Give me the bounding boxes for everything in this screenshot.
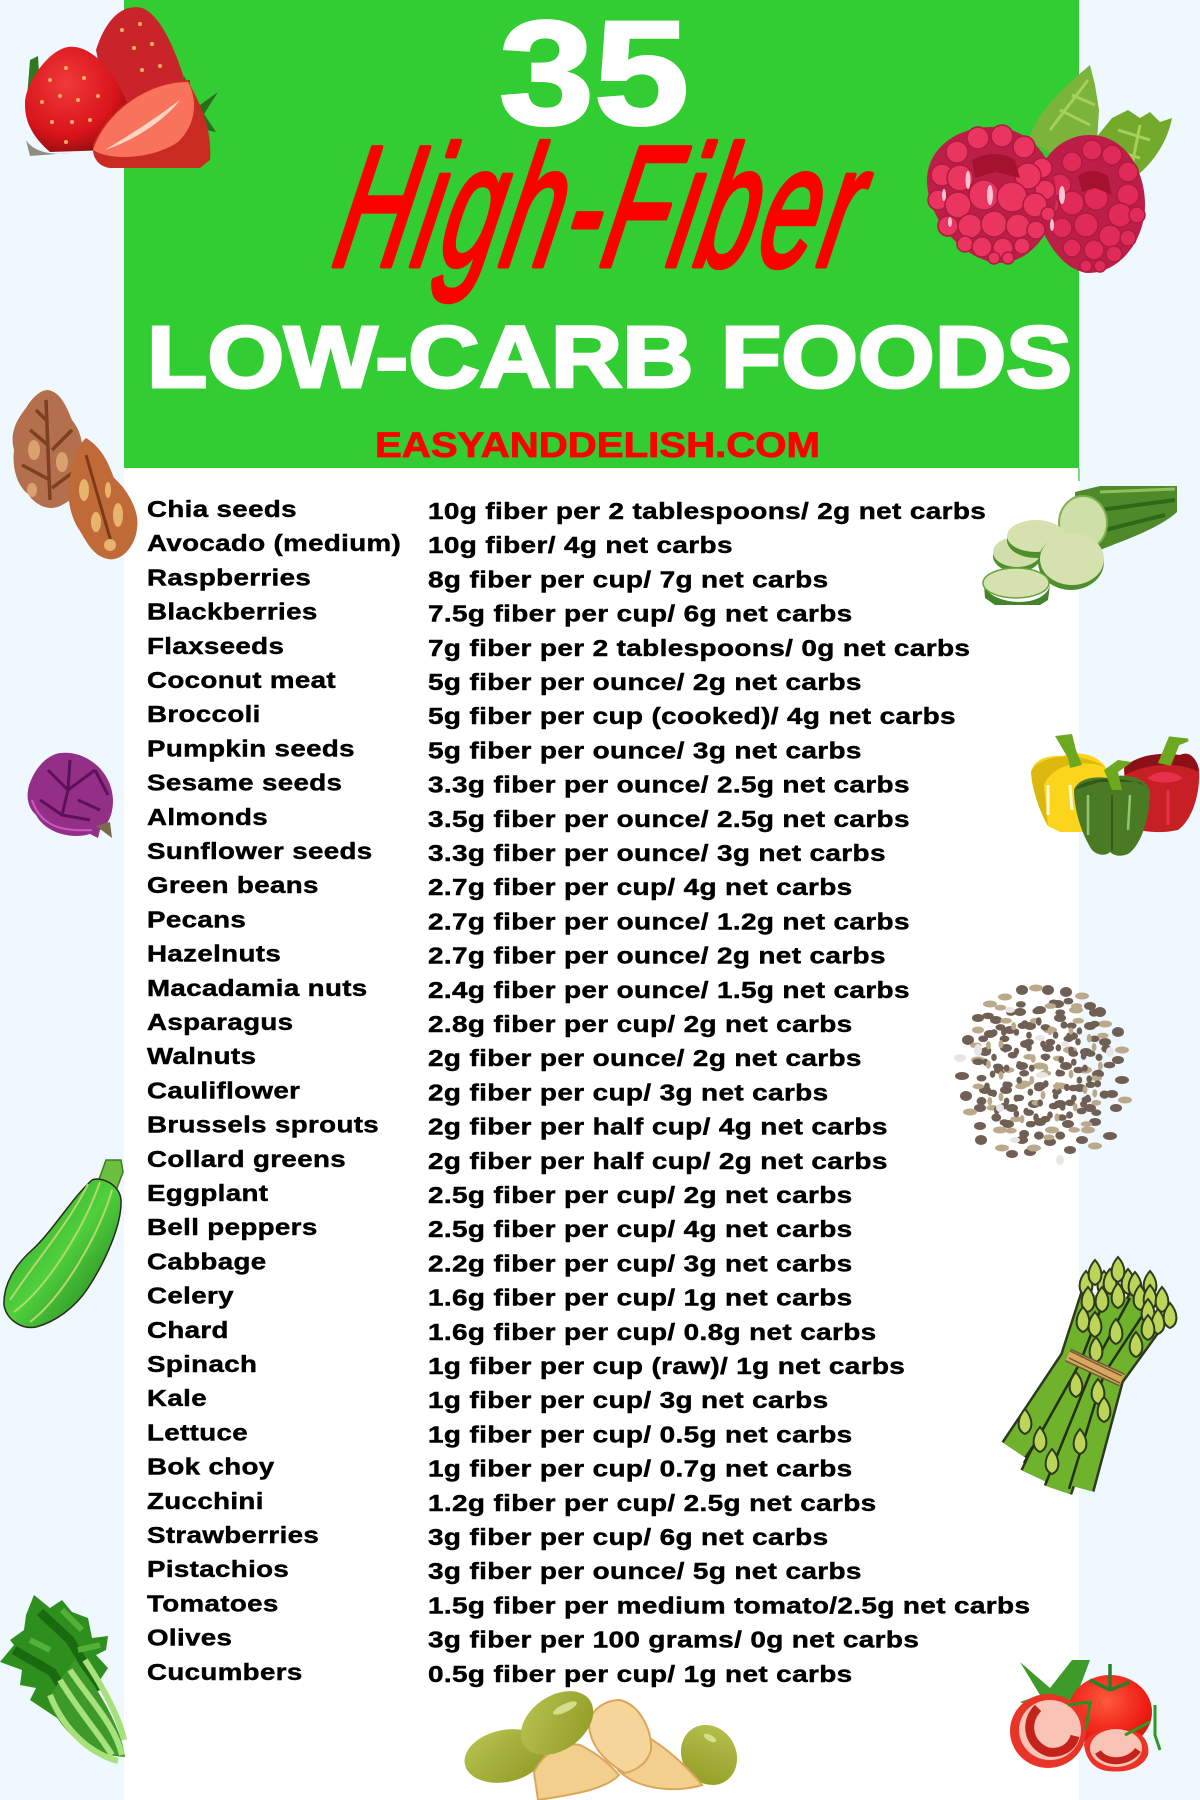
food names column: Bok choy bbox=[147, 1455, 275, 1480]
panel: green header bbox=[124, 0, 1080, 481]
icon: cucumber bbox=[983, 486, 1177, 605]
food names column: Blackberries bbox=[147, 600, 318, 625]
fiber and net carb values column: 2.7g fiber per ounce/ 2g net carbs bbox=[428, 944, 886, 969]
icon: pumpkin seeds bbox=[459, 1678, 748, 1800]
food names column: Tomatoes bbox=[147, 1592, 279, 1617]
fiber and net carb values column: 2.8g fiber per cup/ 2g net carbs bbox=[428, 1012, 853, 1037]
fiber and net carb values column: 5g fiber per ounce/ 3g net carbs bbox=[428, 739, 862, 764]
icon: raspberries bbox=[927, 65, 1172, 273]
fiber and net carb values column: 1g fiber per cup/ 3g net carbs bbox=[428, 1388, 829, 1414]
food names column: Macadamia nuts bbox=[147, 976, 368, 1001]
icon: celery bbox=[0, 1595, 125, 1761]
fiber and net carb values column: 2g fiber per cup/ 3g net carbs bbox=[428, 1081, 829, 1106]
fiber and net carb values column: 0.5g fiber per cup/ 1g net carbs bbox=[428, 1662, 853, 1687]
fiber and net carb values column: 5g fiber per ounce/ 2g net carbs bbox=[428, 670, 862, 695]
food names column bbox=[147, 497, 401, 1685]
fiber and net carb values column: 2.7g fiber per cup/ 4g net carbs bbox=[428, 875, 853, 901]
food names column: Broccoli bbox=[147, 702, 261, 728]
food names column: Celery bbox=[147, 1284, 234, 1309]
website label: EASYANDDELISH.COM bbox=[375, 426, 820, 465]
food names column: Spinach bbox=[147, 1352, 257, 1377]
food names column: Brussels sprouts bbox=[147, 1113, 379, 1138]
fiber and net carb values column: 2.5g fiber per cup/ 2g net carbs bbox=[428, 1183, 853, 1208]
food names column: Cucumbers bbox=[147, 1660, 303, 1685]
icon: tomatoes bbox=[1010, 1660, 1160, 1772]
fiber and net carb values column: 2g fiber per half cup/ 4g net carbs bbox=[428, 1115, 888, 1140]
title: LOW-CARB FOODS: LOW-CARB FOODS bbox=[147, 309, 1072, 406]
food names column: Olives bbox=[147, 1626, 232, 1651]
fiber and net carb values column: 2g fiber per half cup/ 2g net carbs bbox=[428, 1149, 888, 1174]
fiber and net carb values column: 8g fiber per cup/ 7g net carbs bbox=[428, 568, 829, 593]
fiber and net carb values column: 3.3g fiber per ounce/ 3g net carbs bbox=[428, 841, 886, 866]
fiber and net carb values column: 3.3g fiber per ounce/ 2.5g net carbs bbox=[428, 773, 910, 798]
fiber and net carb values column: 1.6g fiber per cup/ 0.8g net carbs bbox=[428, 1320, 877, 1345]
fiber and net carb values column: 10g fiber/ 4g net carbs bbox=[428, 533, 733, 558]
fiber and net carb values column: 3g fiber per 100 grams/ 0g net carbs bbox=[428, 1628, 919, 1653]
fiber and net carb values column: 5g fiber per cup (cooked)/ 4g net carbs bbox=[428, 704, 956, 730]
fiber and net carb values column: 2.7g fiber per ounce/ 1.2g net carbs bbox=[428, 910, 910, 935]
icon: pecans bbox=[13, 390, 137, 559]
fiber and net carb values column: 3.5g fiber per ounce/ 2.5g net carbs bbox=[428, 807, 910, 832]
food names column: Almonds bbox=[147, 805, 268, 830]
fiber and net carb values column: 1g fiber per cup/ 0.7g net carbs bbox=[428, 1457, 853, 1482]
fiber and net carb values column: 1.2g fiber per cup/ 2.5g net carbs bbox=[428, 1491, 877, 1516]
food names column: Cauliflower bbox=[147, 1079, 300, 1104]
fiber and net carb values column: 1.6g fiber per cup/ 1g net carbs bbox=[428, 1286, 853, 1311]
icon: zucchini bbox=[4, 1160, 123, 1327]
fiber and net carb values column: 7g fiber per 2 tablespoons/ 0g net carbs bbox=[428, 636, 970, 661]
food names column: Pecans bbox=[147, 908, 246, 933]
fiber and net carb values column bbox=[428, 499, 1030, 1687]
title: High-Fiber script: High-Fiber bbox=[322, 110, 887, 303]
food names column: Chia seeds bbox=[147, 497, 297, 522]
food names column: Hazelnuts bbox=[147, 942, 281, 967]
fiber and net carb values column: 1.5g fiber per medium tomato/2.5g net carbs bbox=[428, 1594, 1030, 1619]
fiber and net carb values column: 2.5g fiber per cup/ 4g net carbs bbox=[428, 1217, 853, 1243]
food names column: Eggplant bbox=[147, 1181, 269, 1206]
icon: asparagus bbox=[1014, 1257, 1176, 1490]
food names column: Kale bbox=[147, 1386, 207, 1412]
food names column: Coconut meat bbox=[147, 668, 336, 693]
icon: red cabbage bbox=[28, 753, 113, 838]
food names column: Asparagus bbox=[147, 1010, 293, 1035]
fiber and net carb values column: 1g fiber per cup (raw)/ 1g net carbs bbox=[428, 1354, 905, 1379]
food names column: Walnuts bbox=[147, 1044, 256, 1070]
fiber and net carb values column: 1g fiber per cup/ 0.5g net carbs bbox=[428, 1423, 853, 1448]
food names column: Lettuce bbox=[147, 1421, 248, 1446]
panel: white list area bbox=[124, 468, 1079, 1800]
food names column: Green beans bbox=[147, 873, 319, 899]
food names column: Pumpkin seeds bbox=[147, 737, 355, 762]
fiber and net carb values column: 3g fiber per cup/ 6g net carbs bbox=[428, 1525, 829, 1550]
food names column: Sunflower seeds bbox=[147, 839, 373, 864]
food names column: Zucchini bbox=[147, 1489, 264, 1514]
icon: bell peppers bbox=[1031, 734, 1199, 856]
food names column: Raspberries bbox=[147, 566, 311, 591]
food names column: Chard bbox=[147, 1318, 229, 1343]
food names column: Avocado (medium) bbox=[147, 531, 401, 556]
fiber and net carb values column: 2.4g fiber per ounce/ 1.5g net carbs bbox=[428, 978, 910, 1003]
food names column: Collard greens bbox=[147, 1147, 346, 1172]
food names column: Strawberries bbox=[147, 1523, 319, 1548]
fiber and net carb values column: 7.5g fiber per cup/ 6g net carbs bbox=[428, 602, 853, 627]
food names column: Pistachios bbox=[147, 1557, 289, 1583]
fiber and net carb values column: 2.2g fiber per cup/ 3g net carbs bbox=[428, 1252, 853, 1277]
fiber and net carb values column: 3g fiber per ounce/ 5g net carbs bbox=[428, 1559, 862, 1585]
food names column: Flaxseeds bbox=[147, 634, 284, 659]
fiber and net carb values column: 2g fiber per ounce/ 2g net carbs bbox=[428, 1046, 862, 1072]
fiber and net carb values column: 10g fiber per 2 tablespoons/ 2g net carbs bbox=[428, 499, 986, 524]
icon: chia seed pile bbox=[954, 984, 1132, 1165]
food names column: Cabbage bbox=[147, 1250, 267, 1275]
food names column: Sesame seeds bbox=[147, 771, 342, 796]
icon: strawberries bbox=[25, 7, 218, 168]
food names column: Bell peppers bbox=[147, 1215, 318, 1241]
